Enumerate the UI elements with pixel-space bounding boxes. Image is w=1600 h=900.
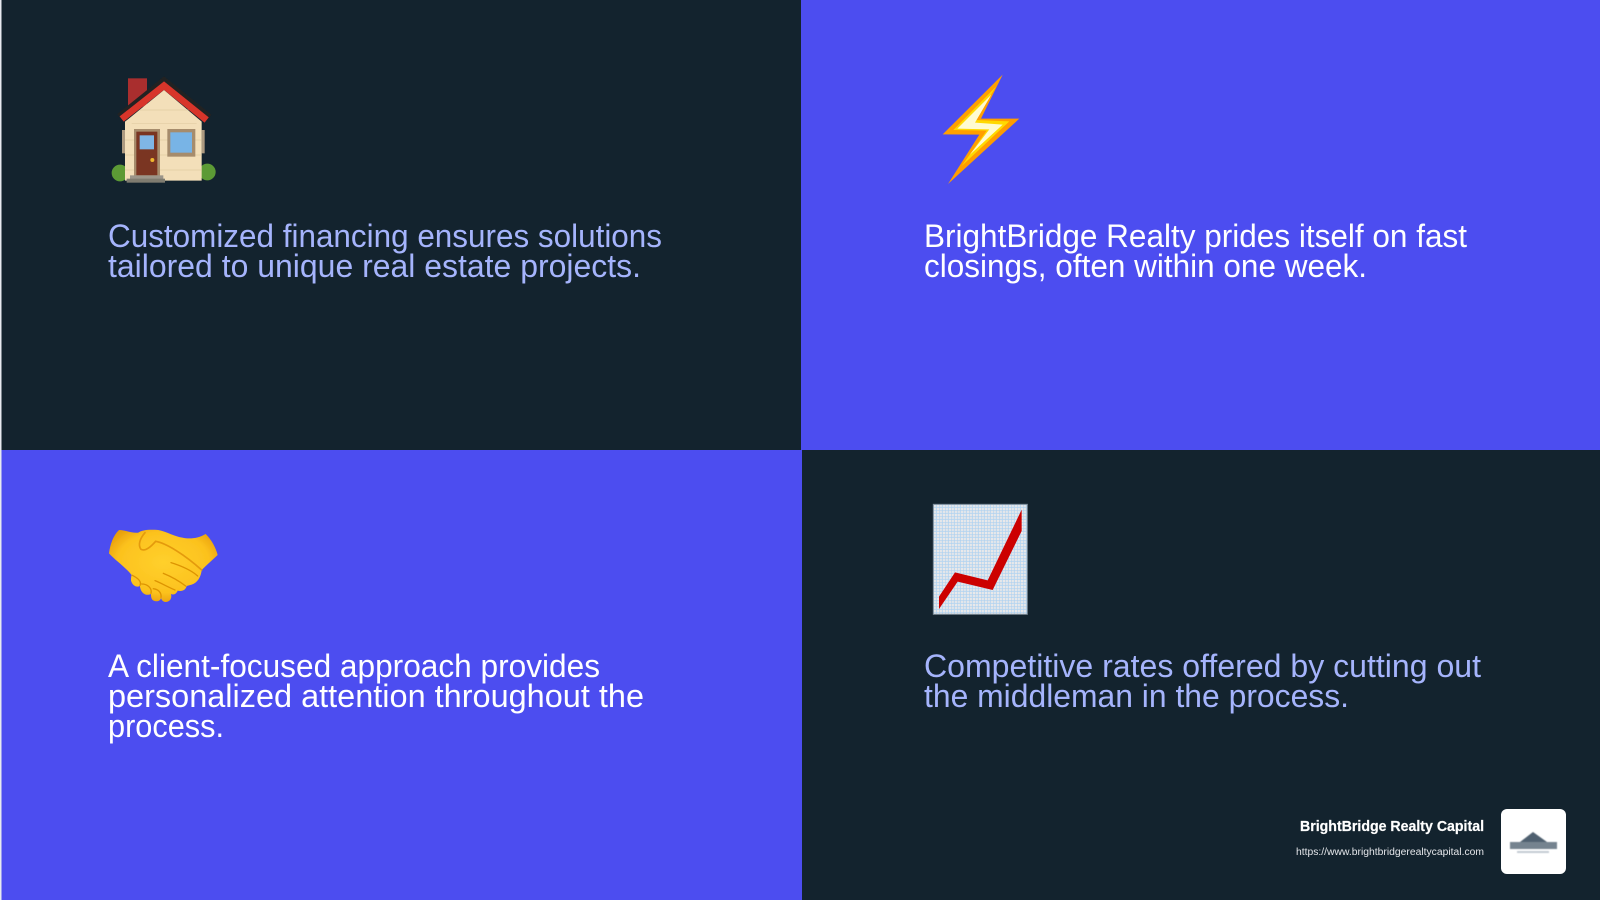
text: client-focused approach xyxy=(108,648,644,744)
brand block xyxy=(1296,809,1566,874)
panel: competitive rates xyxy=(802,450,1600,900)
panel: fast closings xyxy=(801,0,1600,450)
text: fast closings: BrightBridge Realty prides itself on fast xyxy=(924,218,1467,254)
text: fast closings xyxy=(924,218,1467,284)
text: competitive rates: the middleman in the process. xyxy=(924,678,1349,714)
text: client-focused approach: personalized attention throughout the xyxy=(108,678,644,714)
text: competitive rates xyxy=(924,648,1481,714)
logo tile xyxy=(1501,809,1566,874)
icon: house xyxy=(112,78,216,183)
icon: lightning bolt xyxy=(943,75,1019,184)
text: competitive rates: Competitive rates offered by cutting out xyxy=(924,648,1481,684)
icon: chart increasing xyxy=(933,504,1027,614)
brand url: https://www.brightbridgerealtycapital.com xyxy=(1296,847,1484,858)
text: customized financing: Customized financing ensures solutions xyxy=(108,218,662,254)
text: fast closings: closings, often within one week. xyxy=(924,248,1367,284)
text: client-focused approach: process. xyxy=(108,708,224,744)
text: customized financing: tailored to unique real estate projects. xyxy=(108,248,641,284)
icon: handshake xyxy=(109,530,218,602)
text: customized financing xyxy=(108,218,662,284)
panel: customized financing xyxy=(0,0,801,450)
panel: client-focused approach xyxy=(0,450,802,900)
brand name: BrightBridge Realty Capital xyxy=(1300,819,1484,835)
decorative left edge xyxy=(0,0,2,900)
text: client-focused approach: A client-focused approach provides xyxy=(108,648,600,684)
